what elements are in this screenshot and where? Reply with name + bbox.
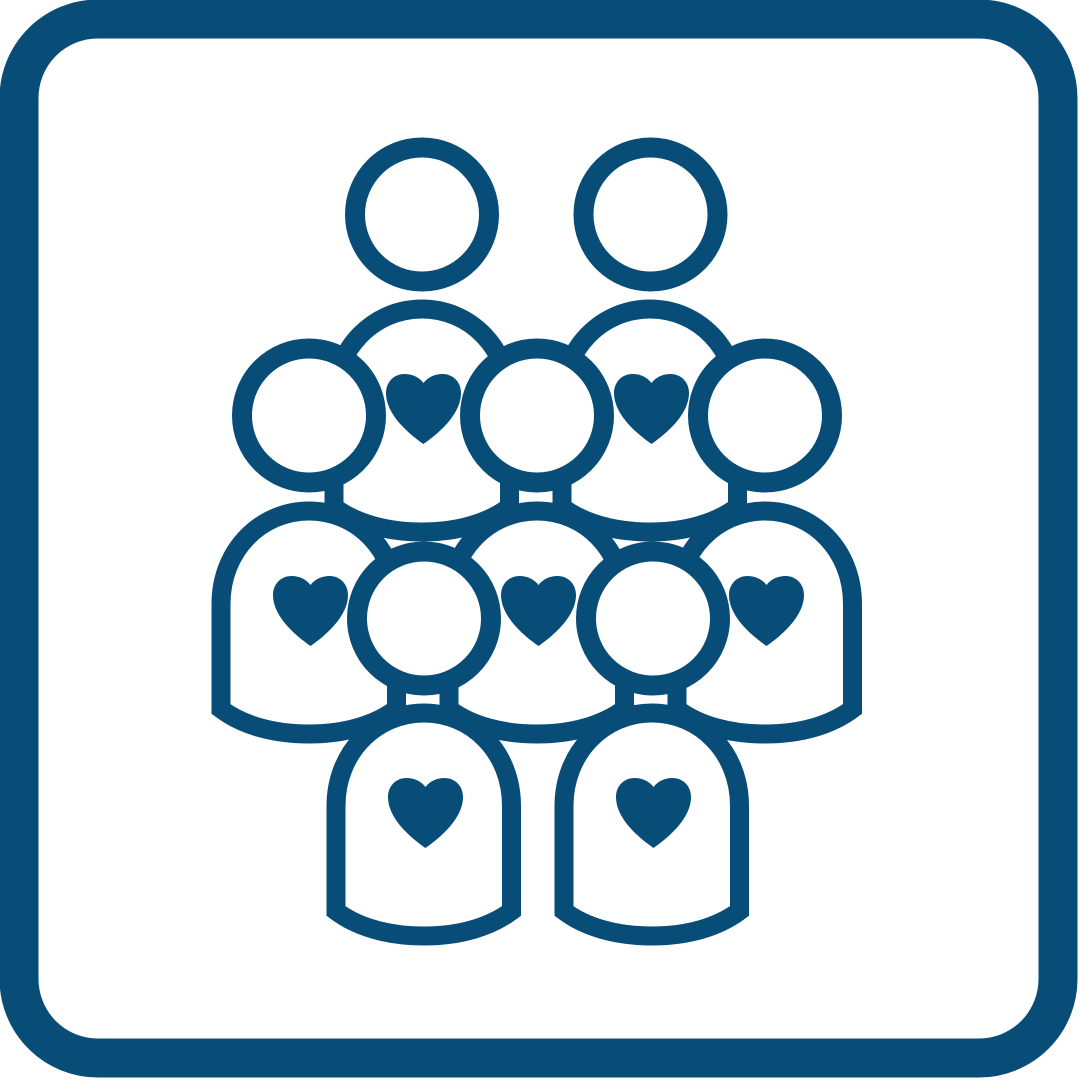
middle row person 1 — [221, 348, 396, 734]
middle row person 2 — [449, 348, 624, 734]
front row person 1 — [336, 552, 512, 936]
back row person 2 — [562, 148, 738, 532]
back row person 1 — [334, 148, 510, 532]
icon: group of people with hearts — [221, 148, 852, 936]
middle row person 3 — [677, 348, 852, 734]
front row person 2 — [564, 552, 740, 936]
